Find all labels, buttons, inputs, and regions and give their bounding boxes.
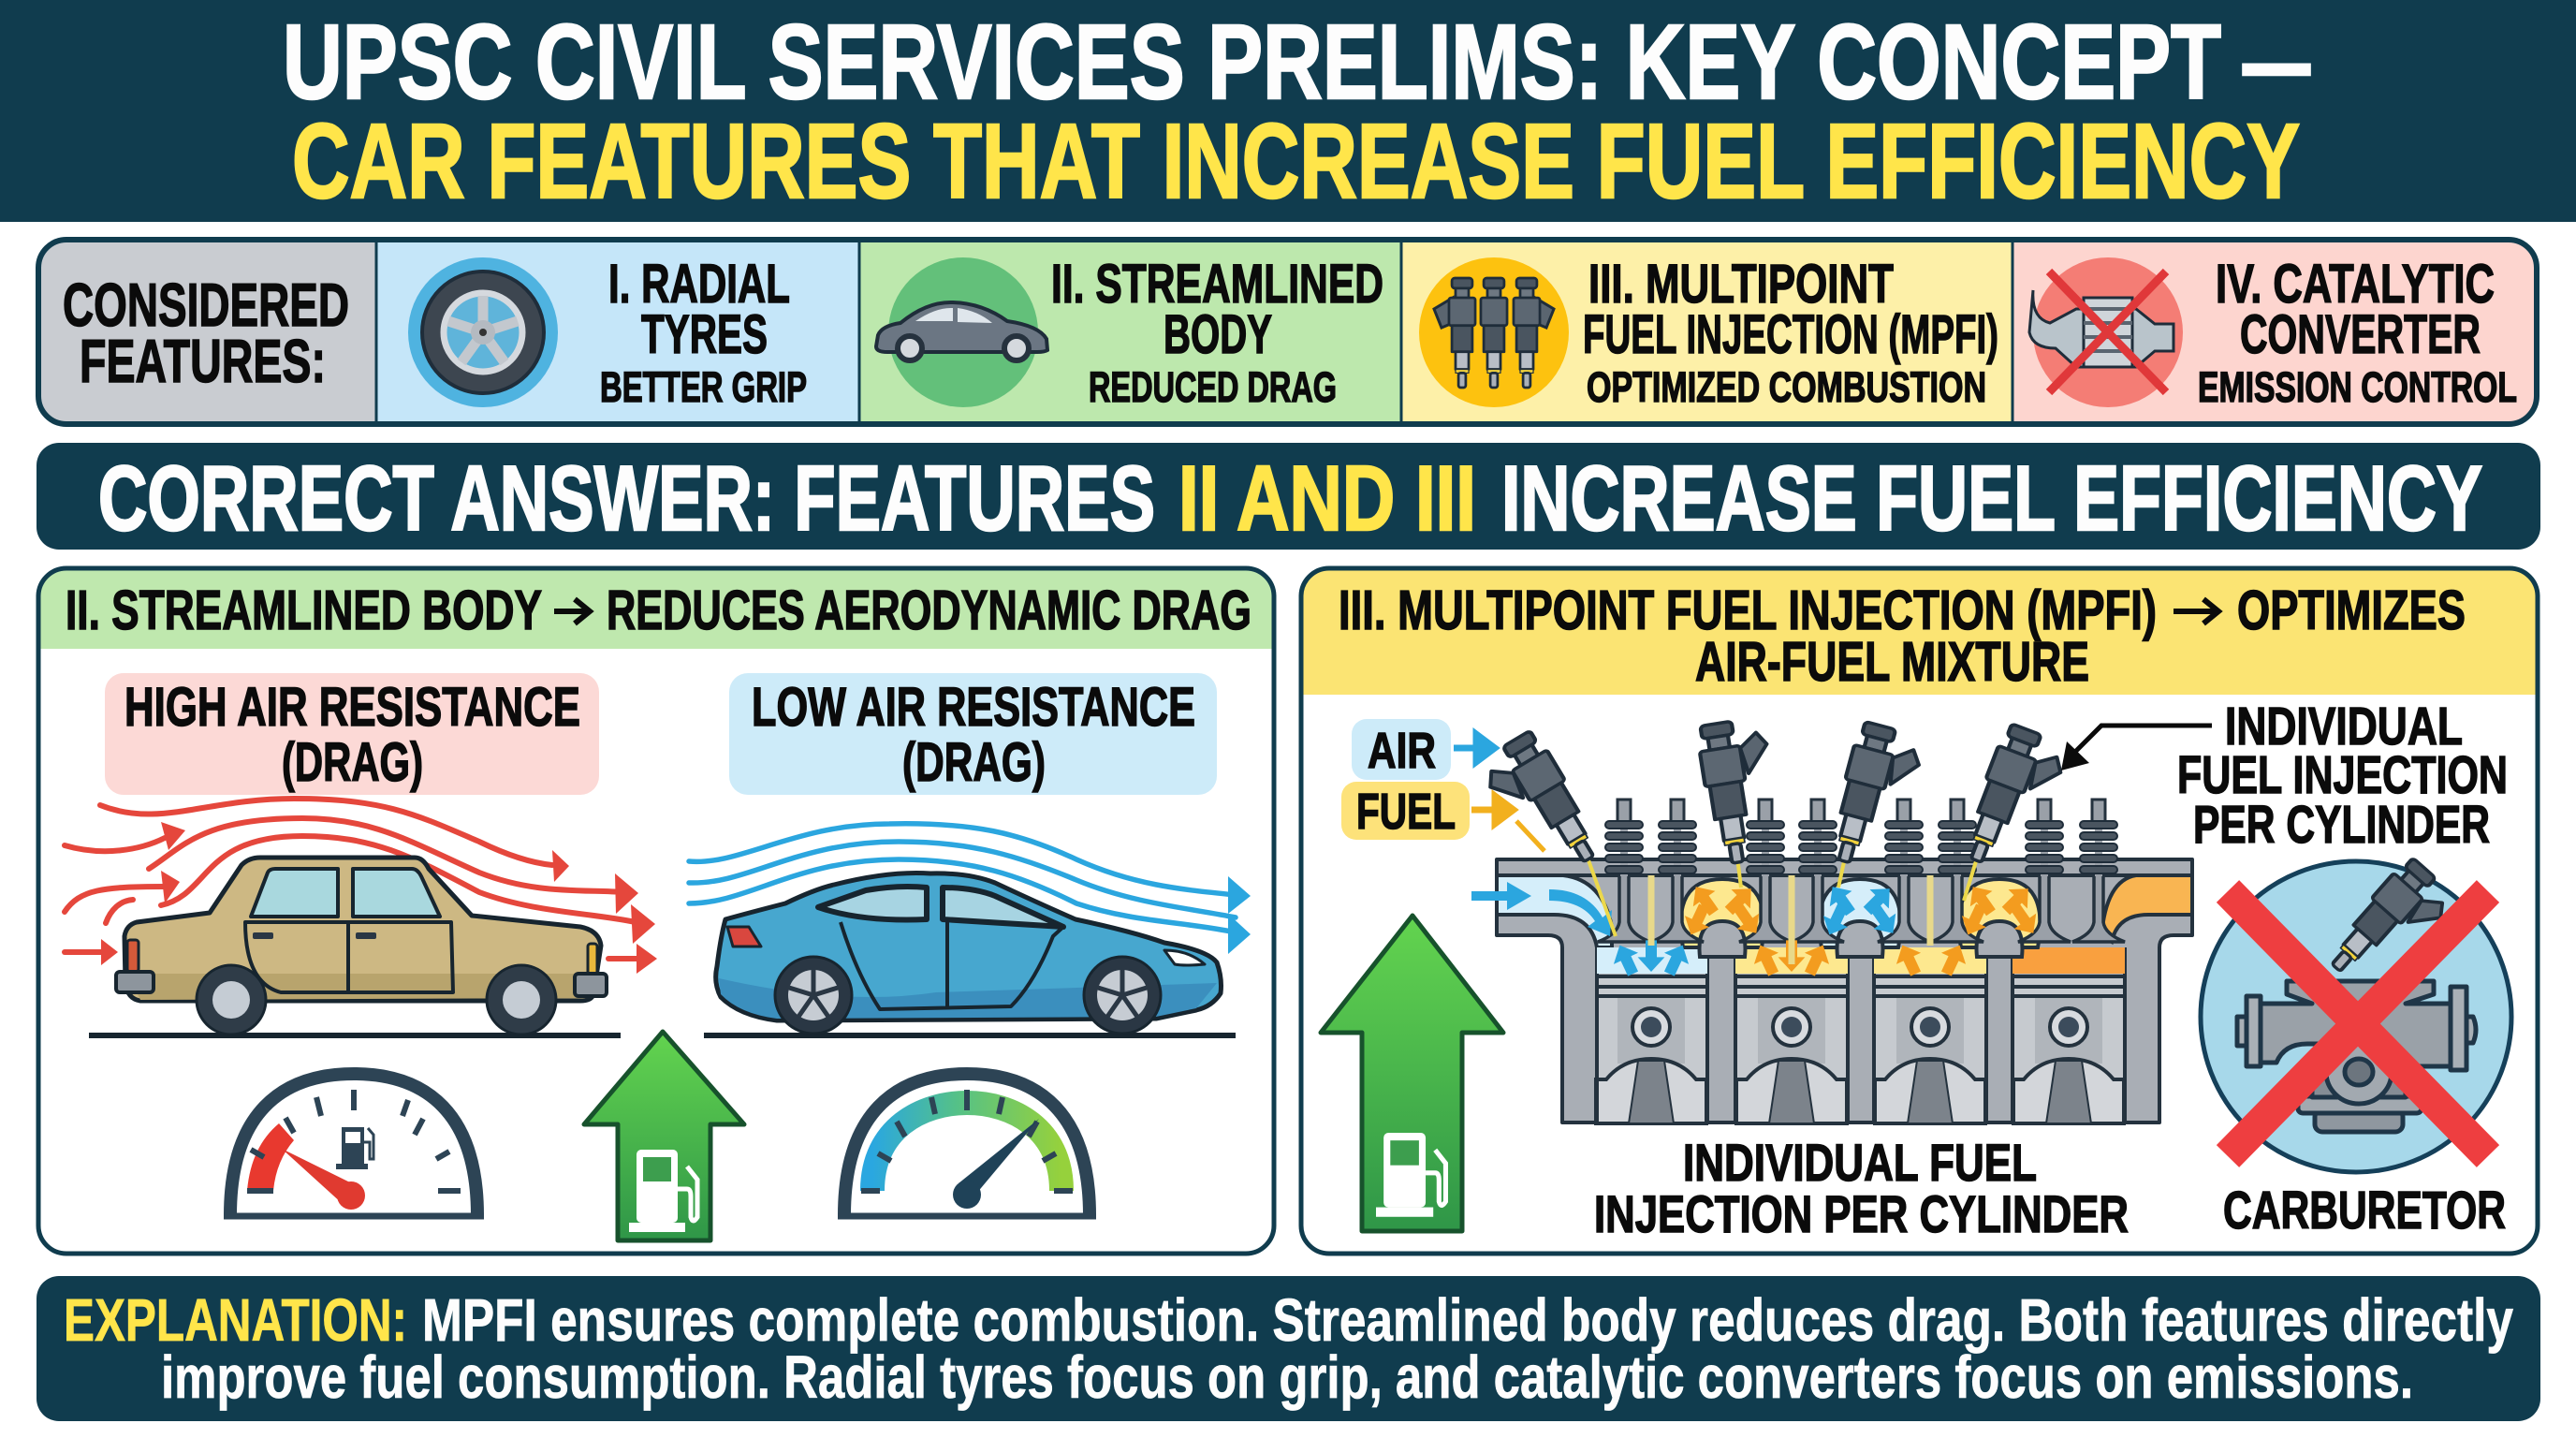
panel heading: REDUCES AERODYNAMIC DRAG bbox=[607, 580, 1251, 641]
valves and springs bbox=[1598, 800, 2125, 942]
feature II text: BODY bbox=[1164, 304, 1272, 365]
combustion chambers bbox=[1597, 947, 2125, 974]
feature I text bbox=[600, 254, 807, 411]
correct answer banner: CORRECT ANSWER: FEATURES bbox=[98, 447, 1155, 550]
correct answer banner: II AND III bbox=[1178, 447, 1476, 550]
panel: streamlined body bbox=[38, 568, 1274, 1254]
airflow and combustion arrows bbox=[1471, 858, 2044, 979]
exhaust port bbox=[2101, 875, 2192, 942]
feature I text: I. RADIAL bbox=[608, 254, 790, 315]
panel: considered features strip bbox=[37, 238, 2539, 426]
feature IV text: CONVERTER bbox=[2240, 304, 2481, 365]
panel heading: OPTIMIZES bbox=[2237, 580, 2466, 641]
four fuel injectors bbox=[1476, 716, 2071, 884]
icon: catalytic converter crossed out bbox=[2029, 257, 2183, 407]
label: considered features bbox=[63, 271, 349, 395]
callout: high air resistance: (DRAG) bbox=[282, 732, 423, 793]
panel heading bbox=[1339, 580, 2466, 693]
callout: high air resistance: HIGH AIR RESISTANCE bbox=[124, 677, 580, 738]
label: individual fuel injection per cylinder: INDIVIDUAL bbox=[2225, 697, 2463, 756]
blue airflow lines bbox=[689, 824, 1251, 954]
feature I text: BETTER GRIP bbox=[600, 363, 807, 411]
engine cross-section bbox=[1471, 716, 2192, 1123]
icon: streamlined car bbox=[876, 257, 1047, 407]
label: considered features: FEATURES: bbox=[80, 327, 326, 395]
icon: fuel injectors bbox=[1419, 257, 1569, 407]
callout: high air resistance bbox=[105, 673, 599, 795]
panel heading: II. STREAMLINED BODY bbox=[66, 580, 542, 641]
red airflow arrows bbox=[65, 799, 657, 974]
caption: individual fuel injection per cylinder: INJECTION PER CYLINDER bbox=[1594, 1184, 2129, 1243]
feature II text: II. STREAMLINED bbox=[1051, 254, 1383, 315]
explanation banner bbox=[37, 1276, 2540, 1421]
label: fuel: FUEL bbox=[1356, 784, 1456, 840]
label: air bbox=[1352, 719, 1495, 780]
title banner bbox=[0, 0, 2576, 222]
feature III text: III. MULTIPOINT bbox=[1588, 254, 1894, 315]
callout: low air resistance: LOW AIR RESISTANCE bbox=[752, 677, 1195, 738]
arrow: leader to injector bbox=[2061, 726, 2212, 770]
feature III text bbox=[1583, 254, 1998, 411]
feature IV text bbox=[2198, 254, 2517, 411]
panel: multipoint fuel injection bbox=[1301, 568, 2538, 1254]
correct answer banner bbox=[37, 443, 2540, 550]
arrow: improved fuel efficiency bbox=[584, 1032, 744, 1240]
feature III text: FUEL INJECTION (MPFI) bbox=[1583, 304, 1998, 365]
icon: carburetor crossed out bbox=[2201, 855, 2511, 1172]
arrow: improved fuel efficiency bbox=[1321, 916, 1503, 1231]
caption: individual fuel injection per cylinder: INDIVIDUAL FUEL bbox=[1683, 1133, 2037, 1192]
gauge: low fuel efficiency bbox=[224, 1074, 484, 1216]
label: air: AIR bbox=[1368, 723, 1436, 779]
intake port bbox=[1497, 875, 1612, 947]
feature I text: TYRES bbox=[641, 304, 768, 365]
callout: low air resistance: (DRAG) bbox=[902, 732, 1046, 793]
valve chamber domes bbox=[1681, 879, 2041, 957]
feature IV text: IV. CATALYTIC bbox=[2216, 254, 2495, 315]
caption: individual fuel injection per cylinder bbox=[1594, 1133, 2129, 1243]
old boxy car bbox=[116, 858, 607, 1034]
label: fuel bbox=[1341, 782, 1544, 851]
label: considered features: CONSIDERED bbox=[63, 271, 349, 339]
panel heading: AIR-FUEL MIXTURE bbox=[1695, 631, 2089, 693]
cylinder walls and pistons bbox=[1596, 947, 2125, 1123]
callout: low air resistance bbox=[729, 673, 1217, 795]
streamlined blue car bbox=[716, 873, 1221, 1034]
label: individual fuel injection per cylinder bbox=[2177, 697, 2508, 855]
icon: radial tyre bbox=[408, 257, 558, 407]
ground lines bbox=[89, 1033, 1236, 1038]
feature II text bbox=[1051, 254, 1383, 411]
explanation banner: EXPLANATION: bbox=[64, 1286, 407, 1354]
feature III text: OPTIMIZED COMBUSTION bbox=[1587, 363, 1986, 411]
panel heading: III. MULTIPOINT FUEL INJECTION (MPFI) bbox=[1339, 580, 2157, 641]
gauge: high fuel efficiency bbox=[838, 1074, 1096, 1216]
feature II text: REDUCED DRAG bbox=[1089, 363, 1337, 411]
title line 1: — bbox=[2243, 3, 2310, 121]
panel heading bbox=[66, 580, 1251, 641]
